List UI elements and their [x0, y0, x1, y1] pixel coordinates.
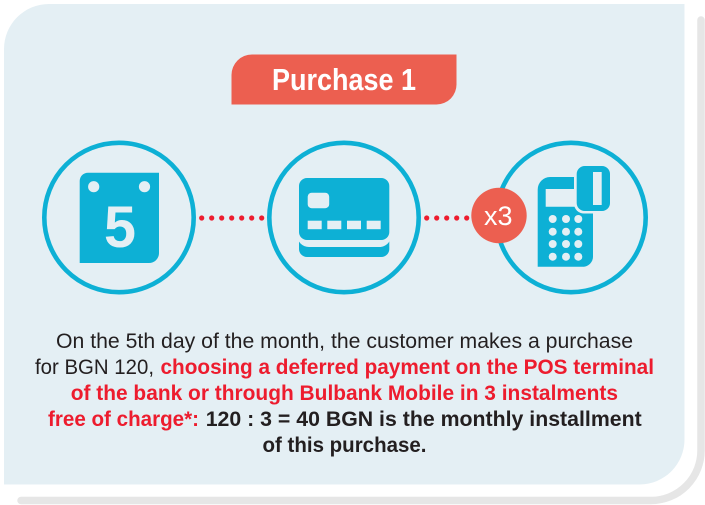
icon: bank card: [269, 143, 419, 292]
badge: x3 instalments: x3: [484, 201, 512, 231]
text block: purchase explanation: for BGN 120,: [35, 355, 154, 379]
heading: Purchase 1 tag: [232, 54, 457, 105]
connector: dotted line from card to x3 badge: [424, 215, 469, 221]
connector: dotted line from calendar to card: [199, 215, 264, 221]
text block: purchase explanation: On the 5th day of the month, the customer makes a purchase: [56, 329, 633, 353]
text block: purchase explanation: choosing a deferred payment on the POS terminal: [160, 355, 654, 379]
text block: purchase explanation: [35, 329, 654, 457]
icon: calendar showing day 5: [44, 143, 194, 292]
text block: purchase explanation: free of charge*:: [48, 407, 199, 431]
icon: calendar showing day 5: 5: [104, 195, 136, 260]
badge: x3 instalments: [471, 188, 527, 243]
heading: Purchase 1 tag: Purchase 1: [272, 63, 416, 97]
text block: purchase explanation: of the bank or through Bulbank Mobile in 3 instalments: [71, 381, 618, 405]
text block: purchase explanation: 120 : 3 = 40 BGN is the monthly installment: [206, 407, 642, 431]
icon: POS terminal with card: [496, 143, 646, 292]
text block: purchase explanation: of this purchase.: [262, 433, 426, 457]
